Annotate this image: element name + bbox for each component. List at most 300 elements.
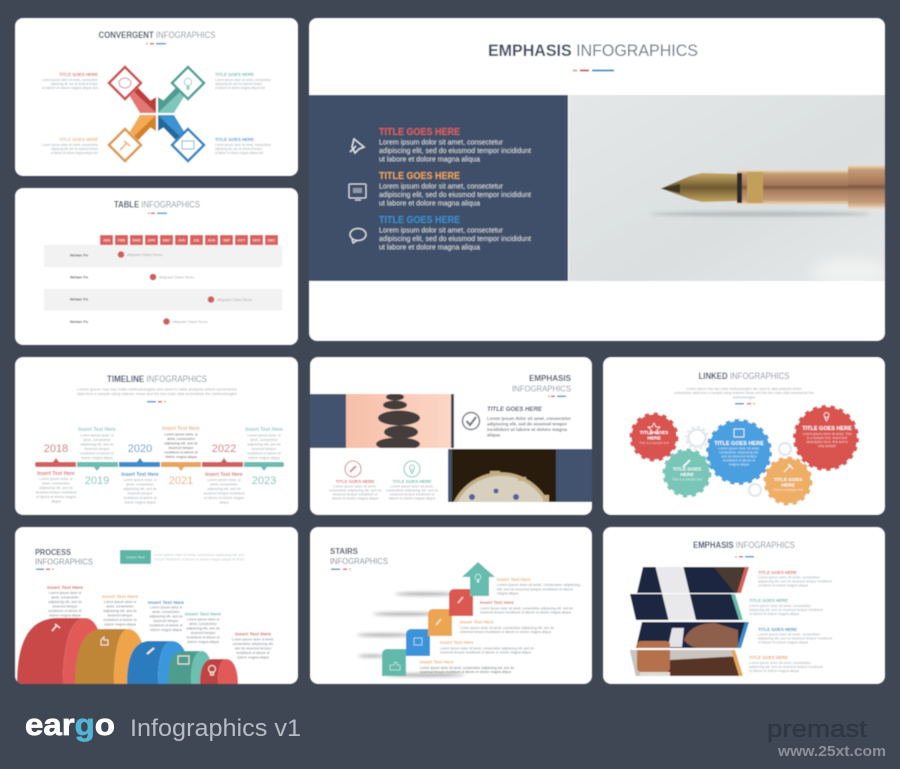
step 2 text <box>102 594 138 626</box>
step 3 text: adipiscing elit, sed do <box>149 614 183 618</box>
step 1 text: adipiscing elit, sed do <box>48 600 82 604</box>
heading: table: TABLE INFOGRAPHICS <box>114 200 200 210</box>
row 1: Aliquam Diam Nunc <box>127 252 162 257</box>
heading: convergent: CONVERGENT INFOGRAPHICS <box>98 30 216 40</box>
heading: process: PROCESS <box>35 547 71 557</box>
stair text 1: Lorem ipsum dolor sit amet, consectetur adipiscing elit, sed do <box>420 666 514 670</box>
stair shadows <box>357 592 465 677</box>
diamond: monitor icon <box>172 129 204 161</box>
step 5 text: dolore magna aliqua <box>237 656 269 660</box>
text: item 2: ut labore et dolore magna aliqua <box>379 198 481 208</box>
stair text 3: Lorem ipsum dolor sit amet, consectetur adipiscing elit, sed do <box>460 626 554 630</box>
accent marks <box>146 43 166 44</box>
row 2: Aliquam Diam Nunc <box>159 274 194 280</box>
gear: red right: description here, this text is <box>806 440 848 444</box>
description <box>674 387 814 400</box>
step 1 text: dolore magna aliqua <box>49 614 81 618</box>
accent marks <box>735 556 754 558</box>
stair text 5: magna aliqua <box>497 592 518 596</box>
heading: timeline: TIMELINE INFOGRAPHICS <box>107 374 207 384</box>
step 2 text: eiusmod tempor <box>107 614 133 618</box>
step 1 text: incididunt ut labore et <box>48 609 82 613</box>
text: bottom left <box>42 137 99 155</box>
accent marks <box>548 396 566 397</box>
milestone body: upper: adipiscing elit, sed do <box>80 442 114 446</box>
step 5 text <box>232 632 274 660</box>
heading: emphasis right aligned: EMPHASIS <box>529 373 571 383</box>
text: slice 4: adipiscing elit, sed do eiusmod tempor incididunt <box>749 665 823 669</box>
milestone text: upper: Insert Text Here <box>78 427 116 433</box>
text: left item: consectetur adipiscing elit, sed do <box>329 488 381 492</box>
month header row: APR <box>148 238 156 242</box>
text: slice 2: ut labore et dolore magna aliqua <box>749 612 800 616</box>
gear: red left <box>631 414 677 460</box>
step 3 text <box>148 600 184 632</box>
step 2 text: adipiscing elit, sed do <box>103 609 137 613</box>
month header row: NOV <box>253 238 261 242</box>
footer title: Infographics v1 <box>130 715 301 742</box>
accent strip: orange <box>731 650 743 676</box>
accent strip: red <box>737 567 749 593</box>
step 4 text: incididunt ut labore et <box>186 636 220 640</box>
text: item 2: Lorem ipsum dolor sit amet, consectetur <box>379 182 503 190</box>
stair text 3 <box>460 620 554 634</box>
text: item 3: TITLE GOES HERE <box>379 215 460 226</box>
stair text 2: eiusmod tempor incididunt ut labore et dolore magna aliqua <box>440 650 531 654</box>
icon: location circle <box>404 461 420 477</box>
milestone body: lower: Lorem ipsum dolor, si <box>123 478 157 482</box>
milestone body: upper: incididunt ut labore et <box>247 452 281 456</box>
month header row: SEP <box>223 238 231 242</box>
year labels: 2020 <box>128 443 152 455</box>
stair text 4: Insert Text Here <box>480 600 514 605</box>
text: title goes here: adipiscing elit, sed do eiusmod tempor <box>487 422 567 426</box>
milestone body: lower: adipiscing elit, sed do <box>123 487 157 491</box>
stair text 4 <box>480 600 573 614</box>
milestone body: upper: adipiscing elit, sed do <box>164 442 198 446</box>
text: item 1: ut labore et dolore magna aliqua <box>379 154 481 164</box>
milestone body: lower: Lorem ipsum dolor, si <box>207 478 241 482</box>
panel: emphasis infographics slices <box>603 527 885 684</box>
milestone body: lower: amet, consectetur <box>42 482 71 486</box>
description: summarize data from a sample using indexes mean and the two main data summarise the <box>674 391 814 395</box>
step 4 text <box>185 612 221 644</box>
stair text 5: elit, sed do eiusmod tempor incididunt ut labore <box>497 588 573 592</box>
step 4 text: dolore magna aliqua <box>187 640 219 644</box>
step: blue <box>406 629 434 656</box>
watermark url: www.25xt.com <box>777 744 886 760</box>
gear: orange <box>765 458 811 504</box>
logo: eargo: eargo <box>25 707 115 742</box>
month header row: JUN <box>178 238 185 242</box>
milestone body: upper: incididunt ut labore et <box>164 450 198 454</box>
milestone body: upper: amet, consectetur <box>83 438 112 442</box>
milestone body: upper: adipiscing elit, sed do <box>247 442 281 446</box>
step 5 text: sed do eiusmod tempor <box>235 646 272 650</box>
gear: orange: TITLE GOES <box>774 477 803 483</box>
step 5 text: Lorem ipsum dolor si amet, <box>232 638 274 642</box>
row 4: Nehan Fo <box>70 319 89 324</box>
heading: emphasis right aligned: INFOGRAPHICS <box>512 384 571 394</box>
heading: stairs: INFOGRAPHICS <box>330 556 388 566</box>
year labels: 2021 <box>169 475 193 487</box>
diamond: pin icon <box>109 129 141 161</box>
text: slice 3: ut labore et dolore magna aliqua <box>758 640 809 644</box>
milestone body: lower: adipiscing elit, sed do <box>207 487 241 491</box>
text: top left: adipiscing elit, sed do eiusmod tempor <box>51 81 98 86</box>
month header row: DEC <box>268 238 276 242</box>
text: title goes here: TITLE GOES HERE <box>487 406 543 413</box>
text: slice 2: adipiscing elit, sed do eiusmod tempor incididunt <box>749 608 823 612</box>
gear: red right: is a sample text, insert text <box>807 436 847 440</box>
milestone body: lower: aliqua <box>51 500 61 504</box>
text: top left: TITLE GOES HERE <box>59 72 98 77</box>
text: slice 3: Lorem ipsum dolor sit amet, consectetur <box>758 632 821 636</box>
step 4 text: amet, consectetur <box>189 622 218 626</box>
gear: blue center: incididunt ut labore et <box>723 458 755 462</box>
stair text 2 <box>440 640 534 654</box>
stair text 5 <box>497 577 580 596</box>
premast logo: premast <box>767 716 867 743</box>
milestone body: lower: dolore magna aliqua <box>124 500 156 504</box>
icon: monitor <box>349 184 366 200</box>
month header row: AUG <box>208 238 216 242</box>
text: bottom left: Lorem ipsum dolor sit amet, consectetur <box>42 142 99 147</box>
text: title goes here <box>487 406 571 438</box>
gear: teal: This is a sample text <box>672 478 702 482</box>
text: slice 1: Lorem ipsum dolor sit amet, consectetur <box>758 576 821 580</box>
text: top right <box>215 72 272 90</box>
heading: emphasis: EMPHASIS INFOGRAPHICS <box>693 540 795 550</box>
heading: process: INFOGRAPHICS <box>35 556 93 566</box>
photo: fountain pen <box>569 95 888 285</box>
row 3 <box>70 296 252 303</box>
step 1 text: Insert Text Here <box>47 585 83 591</box>
text: slice 1: adipiscing elit, sed do eiusmod tempor incididunt <box>758 580 832 584</box>
text: slice 2 <box>749 598 823 616</box>
milestone body: upper: Lorem ipsum dolor, si <box>164 432 198 436</box>
heading: process <box>35 547 93 566</box>
step 3 text: Lorem ipsum dolor si <box>150 606 182 610</box>
accent marks <box>148 212 167 214</box>
text: slice 2: Lorem ipsum dolor sit amet, consectetur <box>749 604 812 608</box>
panel: table infographics <box>15 188 298 345</box>
stair text 1: Insert Text Here <box>420 660 454 664</box>
panel: emphasis infographics photos <box>309 356 593 516</box>
step 2 text: Insert Text Here <box>102 594 138 600</box>
step: teal bottom <box>382 649 406 676</box>
stair text 5: Insert Text Here <box>497 577 531 582</box>
milestone body: upper: eiusmod tempor <box>84 447 110 451</box>
milestone body: lower: ut labore et dolore magna <box>36 495 76 499</box>
milestone text: lower: Insert Text Here <box>205 472 243 478</box>
step 3 text: dolore magna aliqua <box>150 628 182 632</box>
text: item 1: Lorem ipsum dolor sit amet, consectetur <box>379 138 503 146</box>
month header row: MAY <box>163 238 171 242</box>
step: orange <box>428 609 454 636</box>
milestone body: upper: Lorem ipsum dolor, si <box>80 434 114 438</box>
badge: insert text: Insert Text <box>126 554 146 560</box>
stair text 2: Lorem ipsum dolor sit amet, consectetur adipiscing elit, sed do <box>440 646 534 650</box>
gear: red right: only sample <box>818 444 836 448</box>
milestone body: upper: Lorem ipsum dolor, si <box>247 434 281 438</box>
year labels <box>44 443 276 487</box>
text: right item: Lorem ipsum dolor sit amet, <box>390 484 434 488</box>
text: top right: adipiscing elit, sed do eiusmod tempor <box>215 81 262 86</box>
text: top right: ut labore et dolore magna aliqua sed <box>215 85 265 90</box>
text: item 2: adipiscing elit, sed do eiusmod tempor incididunt <box>379 190 532 199</box>
text: right item: eiusmod tempor incididunt ut <box>390 492 434 496</box>
accent marks <box>147 401 166 402</box>
gear: red right: Lorem ipsum dolor sit amet, This <box>802 432 852 436</box>
heading: emphasis right aligned <box>512 373 571 394</box>
text: bottom right: TITLE GOES HERE <box>215 137 254 142</box>
accent strip: teal <box>731 594 743 620</box>
gear: orange: This is a sample text <box>773 488 803 492</box>
text: left item <box>329 479 381 500</box>
accent marks <box>735 403 755 404</box>
text: item 2 <box>379 171 532 208</box>
milestone body: lower: amet, consectetur <box>210 482 239 486</box>
year labels: 2018 <box>44 443 68 455</box>
heading: linked: LINKED INFOGRAPHICS <box>698 371 790 381</box>
sliced photo: business person <box>628 565 750 678</box>
gear: teal <box>664 450 710 496</box>
step 3 text: amet, consectetur <box>152 610 181 614</box>
row 3: Aliquam Diam Nunc <box>217 297 252 302</box>
text: top right: TITLE GOES HERE <box>215 72 254 77</box>
text: left item: TITLE GOES HERE <box>336 479 374 484</box>
text: slice 4 <box>749 655 823 673</box>
text: bottom left: adipiscing elit, sed do eiusmod tempor <box>51 146 98 151</box>
text: bottom right: Lorem ipsum dolor sit amet, consectetur <box>215 142 272 147</box>
step 4 text: Insert Text Here <box>185 612 221 618</box>
description: Lorem ipsum dolor sit amet, consectetur adipiscing elit, sed <box>154 553 244 557</box>
text: right item: consectetur adipiscing elit, sed do <box>386 488 438 492</box>
step 1 text: Lorem ipsum dolor si <box>49 591 81 595</box>
badge: insert text <box>120 550 151 564</box>
milestone body: lower: eiusmod tempor incididunt <box>204 492 244 496</box>
text: slice 3: adipiscing elit, sed do eiusmod tempor incididunt <box>758 636 832 640</box>
milestone text: lower: Insert Text Here <box>121 472 159 478</box>
timeline bar <box>35 458 284 471</box>
icon: rocket circle <box>345 461 361 477</box>
description: tempor incididunt ut labore et dolore magna aliqua sit amet <box>154 558 244 562</box>
milestone body: upper: dolore magna aliqua <box>165 455 197 459</box>
stair text 4: Lorem ipsum dolor sit amet, consectetur adipiscing elit, sed do <box>480 606 573 610</box>
panel: timeline infographics <box>15 357 298 515</box>
text: top left <box>42 72 99 90</box>
milestone body: upper: dolore magna aliqua <box>81 456 113 460</box>
panel: convergent infographics <box>15 18 298 176</box>
text: left item: labore et dolore magna aliqua <box>332 496 378 500</box>
text: left item: eiusmod tempor incididunt ut <box>333 492 377 496</box>
text: slice 1: TITLE GOES HERE <box>758 570 797 575</box>
milestone body: upper: incididunt ut labore et <box>80 452 114 456</box>
gear: blue center: sed do eiusmod tempor <box>721 454 758 458</box>
milestone body: upper: eiusmod tempor <box>251 447 277 451</box>
gear: red left: HERE <box>647 436 661 442</box>
stair text 1 <box>420 660 514 674</box>
heading: emphasis: EMPHASIS INFOGRAPHICS <box>488 41 698 60</box>
year labels: 2022 <box>212 443 236 455</box>
panel: process infographics <box>15 527 298 684</box>
milestone body: lower: aliqua <box>219 500 229 504</box>
text: slice 3: TITLE GOES HERE <box>758 627 797 632</box>
step 4 text: adipiscing elit, sed do <box>186 626 220 630</box>
gear: teal: HERE <box>680 472 694 478</box>
panel: emphasis infographics large <box>309 18 888 341</box>
milestone body: upper: amet, consectetur <box>250 438 279 442</box>
text: item 1: TITLE GOES HERE <box>379 127 460 138</box>
panel: stairs infographics <box>310 527 592 684</box>
text: item 1 <box>379 127 532 164</box>
gear: blue center: Lorem ipsum dolor sit amet, <box>718 446 760 450</box>
month header row: OCT <box>238 238 246 242</box>
year labels: 2019 <box>85 475 109 487</box>
small grey gears <box>686 427 791 496</box>
text: title goes here: incididunt ut labore et dolore magna <box>487 427 568 432</box>
description <box>77 386 238 396</box>
milestone text: upper: Insert Text Here <box>162 426 200 432</box>
step 1 text: eiusmod tempor <box>52 604 78 608</box>
text: slice 4: Lorem ipsum dolor sit amet, consectetur <box>749 661 812 665</box>
text: slice 4: TITLE GOES HERE <box>749 655 788 660</box>
text: slice 4: ut labore et dolore magna aliqua <box>749 669 800 673</box>
step 2 text: Lorem ipsum dolor si <box>104 600 136 604</box>
text: item 3: ut labore et dolore magna aliqua <box>379 242 481 252</box>
description: methodologies <box>733 396 756 400</box>
step 2 text: amet, consectetur <box>106 604 135 608</box>
text: title goes here: aliqua <box>487 432 501 438</box>
milestone body: lower: Lorem ipsum dolor, si <box>39 477 73 481</box>
row 2: Nehan Fo <box>70 274 89 280</box>
milestone body: lower: eiusmod tempor <box>127 492 153 496</box>
step 4 text: Lorem ipsum dolor si <box>187 618 219 622</box>
step 5 text: incididunt ut labore et <box>236 651 270 655</box>
row 1: Nehan Fo <box>70 252 89 258</box>
milestone body: upper: dolore magna aliqua <box>248 456 280 460</box>
milestone text: lower <box>37 471 243 478</box>
step 2 text: dolore magna aliqua <box>104 622 136 626</box>
milestone body: lower: ut labore et dolore magna <box>204 496 244 500</box>
accent marks <box>573 70 614 72</box>
month header row: JUL <box>193 238 201 242</box>
row 4: Aliquam Diam Nunc <box>172 319 208 324</box>
table rows background <box>44 245 282 310</box>
month header row <box>100 235 278 245</box>
milestone body: lower: incididunt ut labore et <box>123 496 157 500</box>
month header row: FEB <box>118 238 125 242</box>
month header row: MAR <box>133 238 141 242</box>
heading: stairs: STAIRS <box>330 546 358 556</box>
description: Lorem ipsum has two main methodologies are used in data analysis which <box>686 387 802 391</box>
navy block bottom <box>556 449 592 502</box>
milestone text: upper <box>78 426 283 433</box>
stair text 3: eiusmod tempor incididunt ut labore et dolore magna aliqua <box>460 630 551 634</box>
description: Lorem ipsum has two main methodologies are used in data analysis which summarize <box>77 386 238 392</box>
row 1 <box>70 251 162 258</box>
row 2 <box>70 274 194 280</box>
navy text panel <box>309 95 568 281</box>
text: slice 1 <box>758 570 832 588</box>
text: top left: Lorem ipsum dolor sit amet, consectetur <box>42 77 99 82</box>
text: slice 2: TITLE GOES HERE <box>749 598 788 603</box>
text: item 3: adipiscing elit, sed do eiusmod tempor incididunt <box>379 234 532 243</box>
cylinders stepped chart <box>17 618 238 684</box>
accent strip: blue <box>737 622 749 648</box>
arrow: teal top <box>462 562 495 596</box>
step: red <box>449 589 479 616</box>
text: item 3 <box>379 215 532 252</box>
text: right item: labore et dolore magna aliqua <box>389 496 435 500</box>
gear: blue center: magna aliqua <box>729 462 749 466</box>
year labels: 2023 <box>252 475 276 487</box>
heading: stairs <box>330 546 388 566</box>
milestone body: lower <box>36 477 244 504</box>
icon: pin <box>350 139 364 153</box>
icon: speech bubble <box>350 228 366 243</box>
milestone text: upper: Insert Text Here <box>245 427 283 433</box>
text: item 1: adipiscing elit, sed do eiusmod tempor incididunt <box>379 146 532 155</box>
step 3 text: Insert Text Here <box>148 600 184 606</box>
milestone body: lower: amet, consectetur <box>126 482 155 486</box>
diamond: speech icon <box>109 67 141 99</box>
text: slice 3 <box>758 627 832 644</box>
accent marks <box>331 568 351 570</box>
stair text 1: eiusmod tempor incididunt ut labore et dolore magna aliqua <box>420 670 511 674</box>
text: right item <box>386 479 438 500</box>
panel: linked infographics <box>603 357 885 515</box>
accent marks <box>36 568 54 570</box>
step 5 text: Insert Text Here <box>235 632 271 638</box>
text: bottom right <box>215 137 272 155</box>
converging arrows diagram <box>130 88 184 140</box>
description <box>154 553 244 562</box>
text: title goes here: Lorem ipsum dolor sit amet, consectetur <box>487 416 571 421</box>
milestone body: lower: eiusmod tempor incididunt <box>36 490 76 494</box>
gear: orange: HERE <box>781 482 795 488</box>
text: top right: Lorem ipsum dolor sit amet, consectetur <box>215 77 272 82</box>
step 2 text: incididunt ut labore et <box>103 618 137 622</box>
milestone text: lower: Insert Text Here <box>37 471 75 477</box>
gear: red left: TITLE GOES <box>640 430 669 436</box>
row 4 <box>70 318 208 325</box>
row 3: Nehan Fo <box>70 296 89 302</box>
step 5 text: consectetur adipiscing elit, <box>232 642 274 646</box>
step 4 text: eiusmod tempor <box>190 631 216 635</box>
gear: teal: TITLE GOES <box>673 466 702 472</box>
gear: blue center <box>708 420 770 484</box>
stair text 2: Insert Text Here <box>440 640 474 645</box>
milestone body: upper: eiusmod tempor <box>168 446 194 450</box>
step 1 text: amet, consectetur <box>51 596 80 600</box>
gear: red left: This is a sample text <box>639 441 669 445</box>
gear: blue center: consectetur adipiscing elit, <box>719 450 759 454</box>
milestone body: upper: amet, consectetur <box>167 437 196 441</box>
step 1 text <box>47 585 83 618</box>
stair text 3: Insert Text Here <box>460 620 494 624</box>
gear: red right: TITLE GOES HERE <box>802 426 852 432</box>
step 3 text: incididunt ut labore et <box>149 624 183 628</box>
process icons <box>52 624 216 675</box>
text: item 3: Lorem ipsum dolor sit amet, consectetur <box>379 226 503 234</box>
diamond: bulb icon <box>172 67 204 99</box>
photo: watch <box>447 448 557 503</box>
gear: blue center: TITLE GOES HERE <box>714 441 764 447</box>
gear: red right <box>794 406 858 470</box>
step 3 text: eiusmod tempor <box>153 619 179 623</box>
